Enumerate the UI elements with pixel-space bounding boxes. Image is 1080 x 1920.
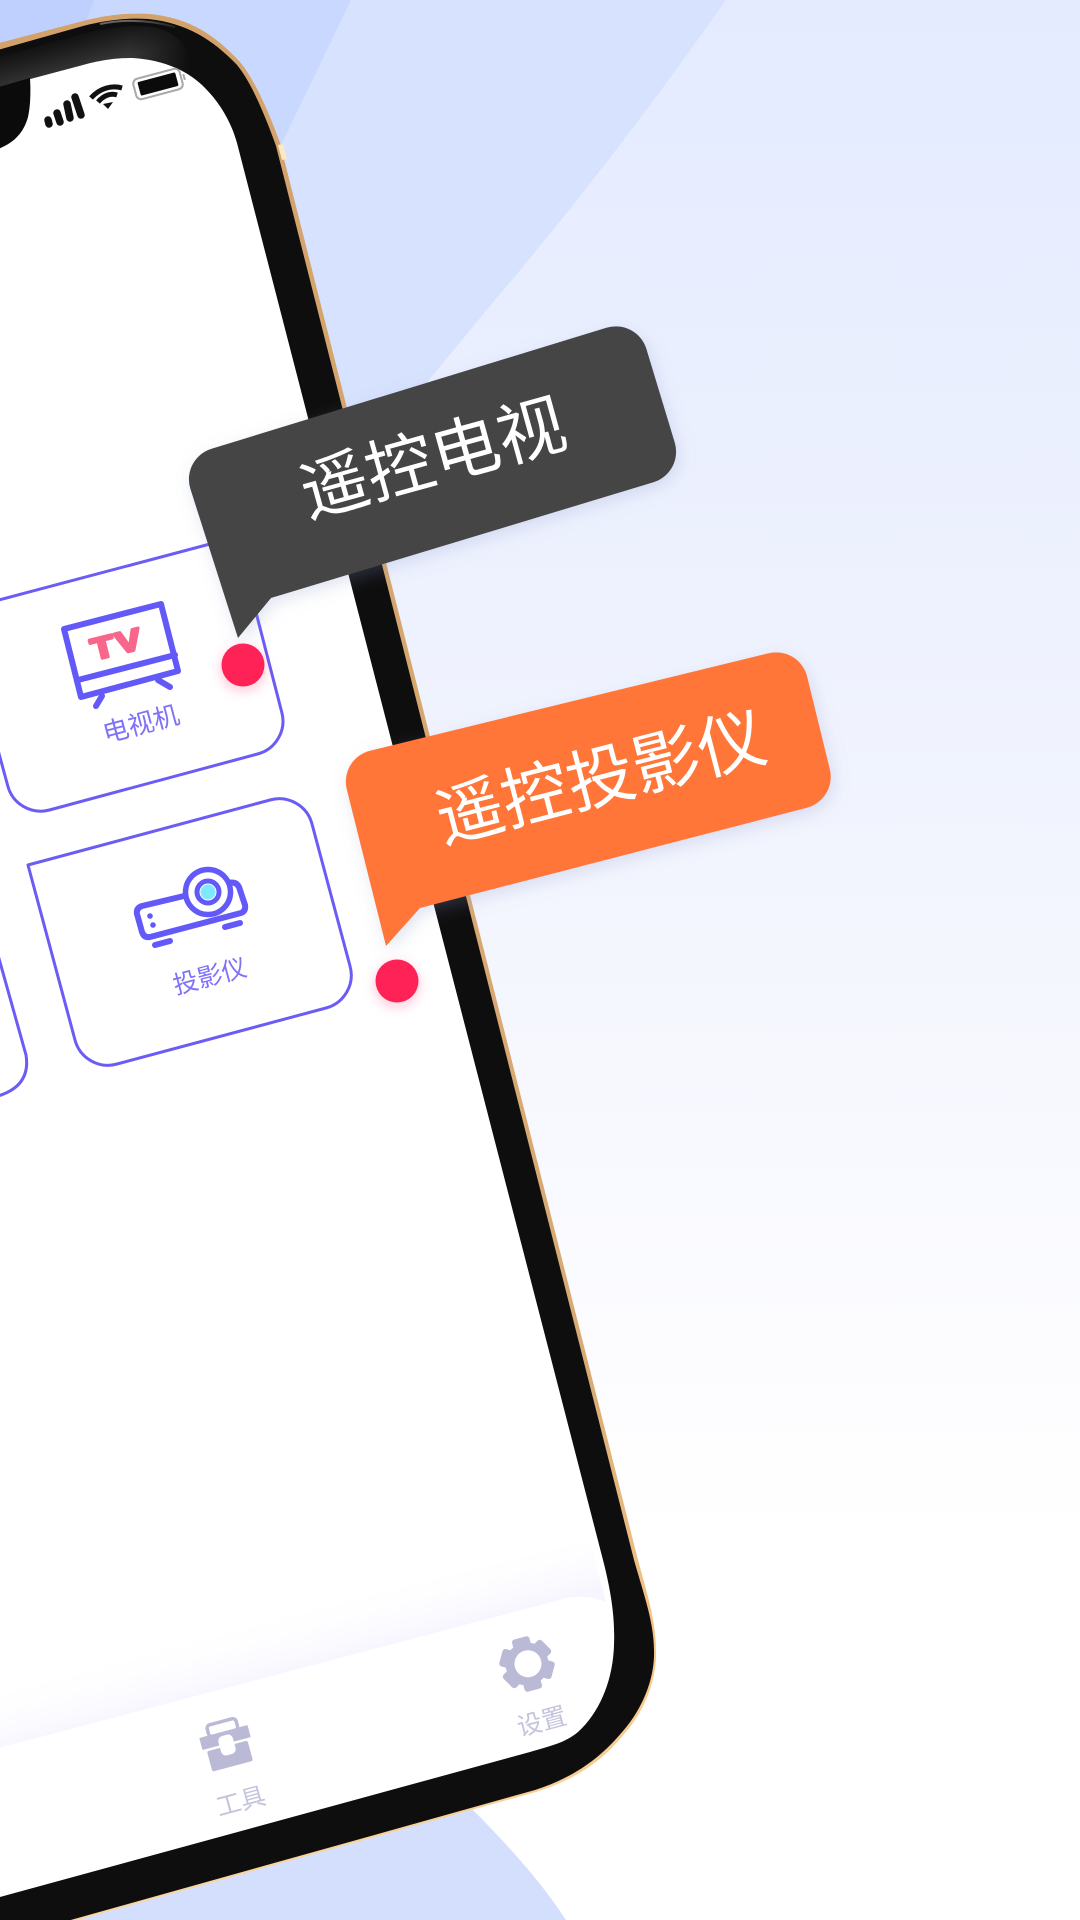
background band: darkest corner xyxy=(0,0,94,46)
bottom nav tint xyxy=(0,1540,606,1749)
background shape: bottom blue arc xyxy=(0,1800,566,1920)
background band: deep blue xyxy=(0,0,351,240)
antenna highlight xyxy=(278,144,287,160)
dark bubble xyxy=(189,326,676,638)
callout: remote projector xyxy=(346,652,831,946)
battery icon xyxy=(132,67,187,100)
icon: gear xyxy=(493,1631,561,1697)
phone xyxy=(0,14,656,1920)
TV card outline xyxy=(0,544,283,811)
phone screen xyxy=(0,58,614,1903)
signal bars xyxy=(48,97,81,124)
status bar xyxy=(48,67,187,124)
wifi icon xyxy=(91,87,122,109)
card: partial left xyxy=(0,955,27,1096)
callout text: 遥控电视 xyxy=(292,386,574,532)
icon: projector xyxy=(137,870,245,945)
background band: mid blue xyxy=(0,0,726,415)
icon: TV xyxy=(64,604,178,706)
card: projector xyxy=(28,799,351,1065)
label: projector: 投影仪 xyxy=(170,954,250,1000)
phone black bezel xyxy=(0,19,654,1920)
label: settings: 设置 xyxy=(514,1702,570,1742)
label: tools: 工具 xyxy=(213,1782,269,1822)
top bezel grey band xyxy=(0,26,205,92)
marker dot: TV xyxy=(222,644,264,686)
label: TV: 电视机 xyxy=(99,699,183,749)
nav item: tools xyxy=(197,1715,269,1822)
card: TV xyxy=(0,544,283,811)
notch xyxy=(0,78,30,150)
nav item: settings xyxy=(493,1631,570,1742)
phone gold frame xyxy=(0,14,656,1920)
icon: TV: TV xyxy=(88,622,147,667)
marker dot: projector xyxy=(376,960,418,1002)
projector card outline xyxy=(28,799,351,1065)
callout: remote TV xyxy=(189,326,676,638)
callout text: 遥控投影仪 xyxy=(428,700,774,858)
top bezel fade xyxy=(136,20,237,88)
frame silver highlight xyxy=(100,21,175,27)
orange bubble xyxy=(346,652,831,946)
icon: toolbox xyxy=(197,1715,257,1773)
